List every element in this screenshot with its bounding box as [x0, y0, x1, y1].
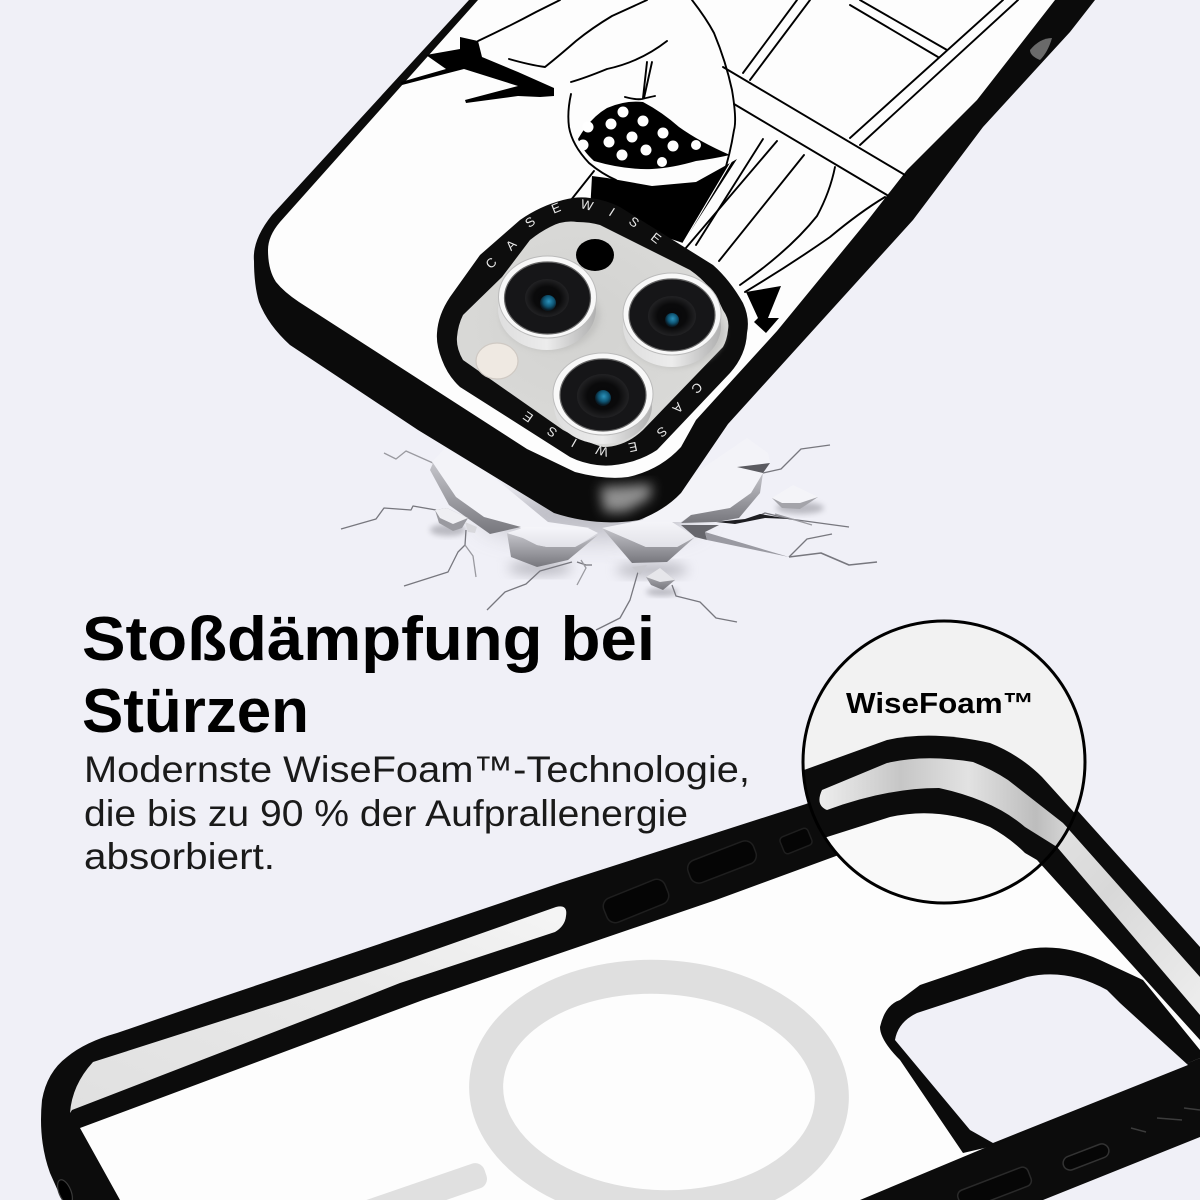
- lens: bottom: [553, 353, 653, 444]
- soft shadows: [430, 493, 824, 596]
- CASEWISE engraved lettering: E: [627, 439, 639, 455]
- island opening with titanium phone: [457, 222, 728, 447]
- CASEWISE engraved lettering: C: [482, 254, 500, 272]
- small right rock: [772, 485, 818, 509]
- CASEWISE engraved lettering: A: [503, 236, 520, 253]
- clear window: [80, 820, 1200, 1200]
- right slab: [640, 438, 770, 522]
- CASEWISE engraved lettering: C: [688, 379, 706, 397]
- high-heel shoe: [401, 37, 554, 103]
- centre-left rock: [507, 527, 598, 567]
- CASEWISE engraved lettering: I: [606, 205, 618, 219]
- body text: absorbiert.: [84, 836, 275, 877]
- MagSafe alignment pill: [347, 1160, 490, 1200]
- dark window opening: [590, 159, 737, 243]
- CASEWISE engraved lettering: S: [522, 213, 538, 231]
- case bumper: [254, 0, 1095, 522]
- centre-right rock: [602, 520, 695, 563]
- polka-dot bikini: [578, 102, 730, 169]
- glare on bumper corner: [600, 484, 652, 512]
- small lower rocks: [632, 565, 675, 590]
- illustration: woman in window: [401, 0, 1018, 333]
- cracked ground impact: [341, 438, 877, 630]
- left slab: [432, 448, 590, 530]
- CASEWISE engraved lettering: S: [654, 423, 670, 441]
- lens: right: [623, 273, 725, 368]
- small shoe at lower right: [746, 286, 781, 333]
- camera cut-out: [880, 948, 1200, 1153]
- CASEWISE engraved lettering: W: [593, 442, 610, 460]
- lens: upper left: [498, 256, 600, 351]
- CASEWISE engraved lettering: E: [520, 408, 536, 426]
- body text: Modernste WiseFoam™-Technologie,: [84, 749, 750, 790]
- CASEWISE engraved lettering: E: [648, 229, 664, 247]
- camera island: [437, 196, 748, 466]
- CASEWISE engraved lettering: S: [626, 213, 642, 231]
- black frame: [41, 745, 1200, 1200]
- CASEWISE engraved lettering: W: [579, 196, 596, 214]
- heading: [82, 605, 655, 746]
- side gap strip, right: [1000, 790, 1200, 1015]
- heading: Stürzen: [82, 677, 309, 746]
- callout: WiseFoam magnifier: [802, 620, 1086, 904]
- dark wedge chips: [737, 463, 770, 473]
- CASEWISE engraved lettering: I: [569, 436, 579, 450]
- flash: [476, 343, 518, 379]
- case white back: [268, 0, 1055, 478]
- volume buttons: [601, 827, 813, 925]
- CASEWISE engraved lettering: A: [669, 400, 686, 417]
- phone with illustrated case, top: [254, 0, 1095, 522]
- lower band details: [55, 1108, 1200, 1200]
- CASEWISE engraved lettering: E: [549, 199, 563, 217]
- CASEWISE engraved lettering: [482, 196, 706, 460]
- side button glare: [1030, 38, 1052, 60]
- callout ring: [803, 621, 1085, 903]
- island ring: [437, 197, 748, 466]
- small left rock: [435, 508, 477, 533]
- window frame line: [683, 157, 734, 243]
- CASEWISE engraved lettering: S: [544, 423, 560, 441]
- magnified frame corner: [804, 736, 1076, 864]
- MagSafe ring: [480, 968, 838, 1200]
- callout label: WiseFoam™: [846, 688, 1034, 720]
- line art: [478, 0, 1018, 292]
- clear case back view, bottom: [41, 745, 1200, 1200]
- body text: die bis zu 90 % der Aufprallenergie: [84, 793, 688, 834]
- microphone hole: [576, 239, 614, 271]
- body text: [84, 749, 750, 877]
- heading: Stoßdämpfung bei: [82, 605, 655, 674]
- side gap strip, left: [70, 906, 566, 1113]
- crack lines: [341, 445, 877, 630]
